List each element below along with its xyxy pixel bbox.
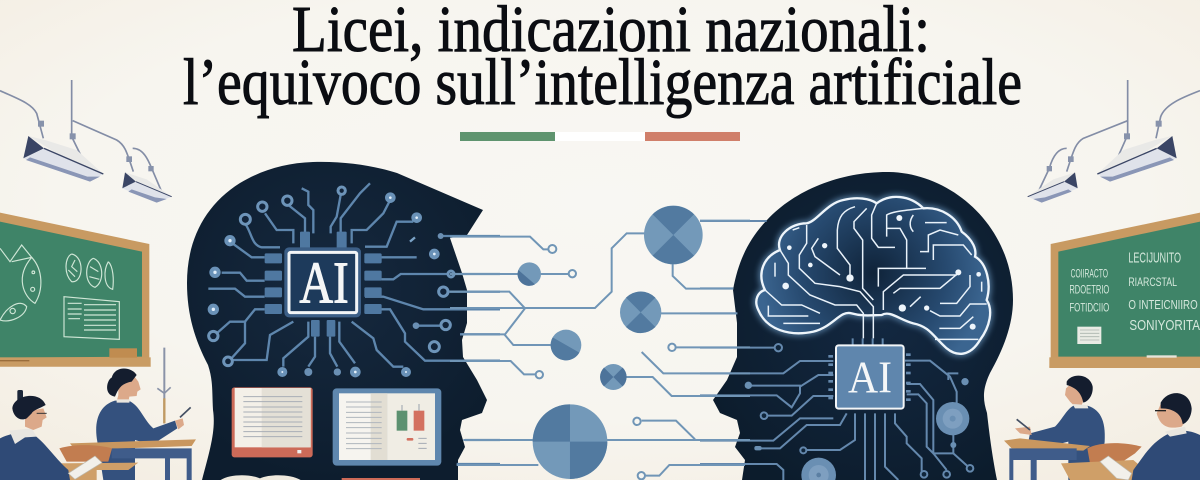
left head circuitry <box>208 183 500 480</box>
network disc 2 <box>518 262 541 286</box>
brain inner traces <box>765 203 987 339</box>
left head silhouette <box>187 162 487 480</box>
chair and front desk, right <box>1061 443 1157 480</box>
student front, right <box>1100 393 1200 480</box>
bottom book tops <box>221 475 420 480</box>
central network <box>450 206 750 479</box>
right head silhouette <box>713 172 1013 480</box>
student front, left <box>0 390 102 480</box>
network disc 4 <box>551 330 581 360</box>
AI chip right: AI <box>848 352 892 402</box>
chair and front desk, left <box>42 445 138 480</box>
ring terminals <box>536 245 676 479</box>
gear discs <box>801 402 969 480</box>
tricolour divider <box>460 132 740 141</box>
icon: open book with chart <box>333 388 441 466</box>
network disc 5 <box>600 364 627 390</box>
chalkboard right: RDOETRIO <box>1069 282 1109 296</box>
circuit nodes <box>209 187 454 366</box>
AI chip: AI <box>299 250 349 316</box>
chalkboard right: RIARCSTAL <box>1128 275 1177 289</box>
student at desk, left back <box>70 348 196 480</box>
network disc 3 <box>620 292 661 333</box>
right classroom scene <box>1004 80 1200 480</box>
network disc 6 <box>533 404 607 479</box>
left classroom scene <box>0 80 196 480</box>
right head brain and circuits <box>700 197 990 480</box>
circuit traces <box>208 183 500 464</box>
title <box>183 0 1022 119</box>
chalkboard right: FOTIDCIIO <box>1069 301 1109 315</box>
AI chip right <box>828 345 911 409</box>
right circuit traces <box>700 221 970 480</box>
chip pads <box>265 232 382 337</box>
ceiling lamps right <box>1028 80 1200 203</box>
chalkboard right <box>1049 213 1200 368</box>
ceiling lamps left <box>0 80 172 203</box>
network disc 1 <box>644 206 703 264</box>
chalkboard right: COIIRACTO <box>1071 266 1108 280</box>
icon: closed book <box>232 387 313 457</box>
student at desk, right back <box>1004 376 1105 480</box>
title: l’equivoco sull’intelligenza artificiale <box>183 46 1022 119</box>
brain <box>756 197 990 354</box>
chalkboard left <box>0 213 151 367</box>
right circuit nodes <box>761 344 973 478</box>
connector lines <box>450 221 750 476</box>
